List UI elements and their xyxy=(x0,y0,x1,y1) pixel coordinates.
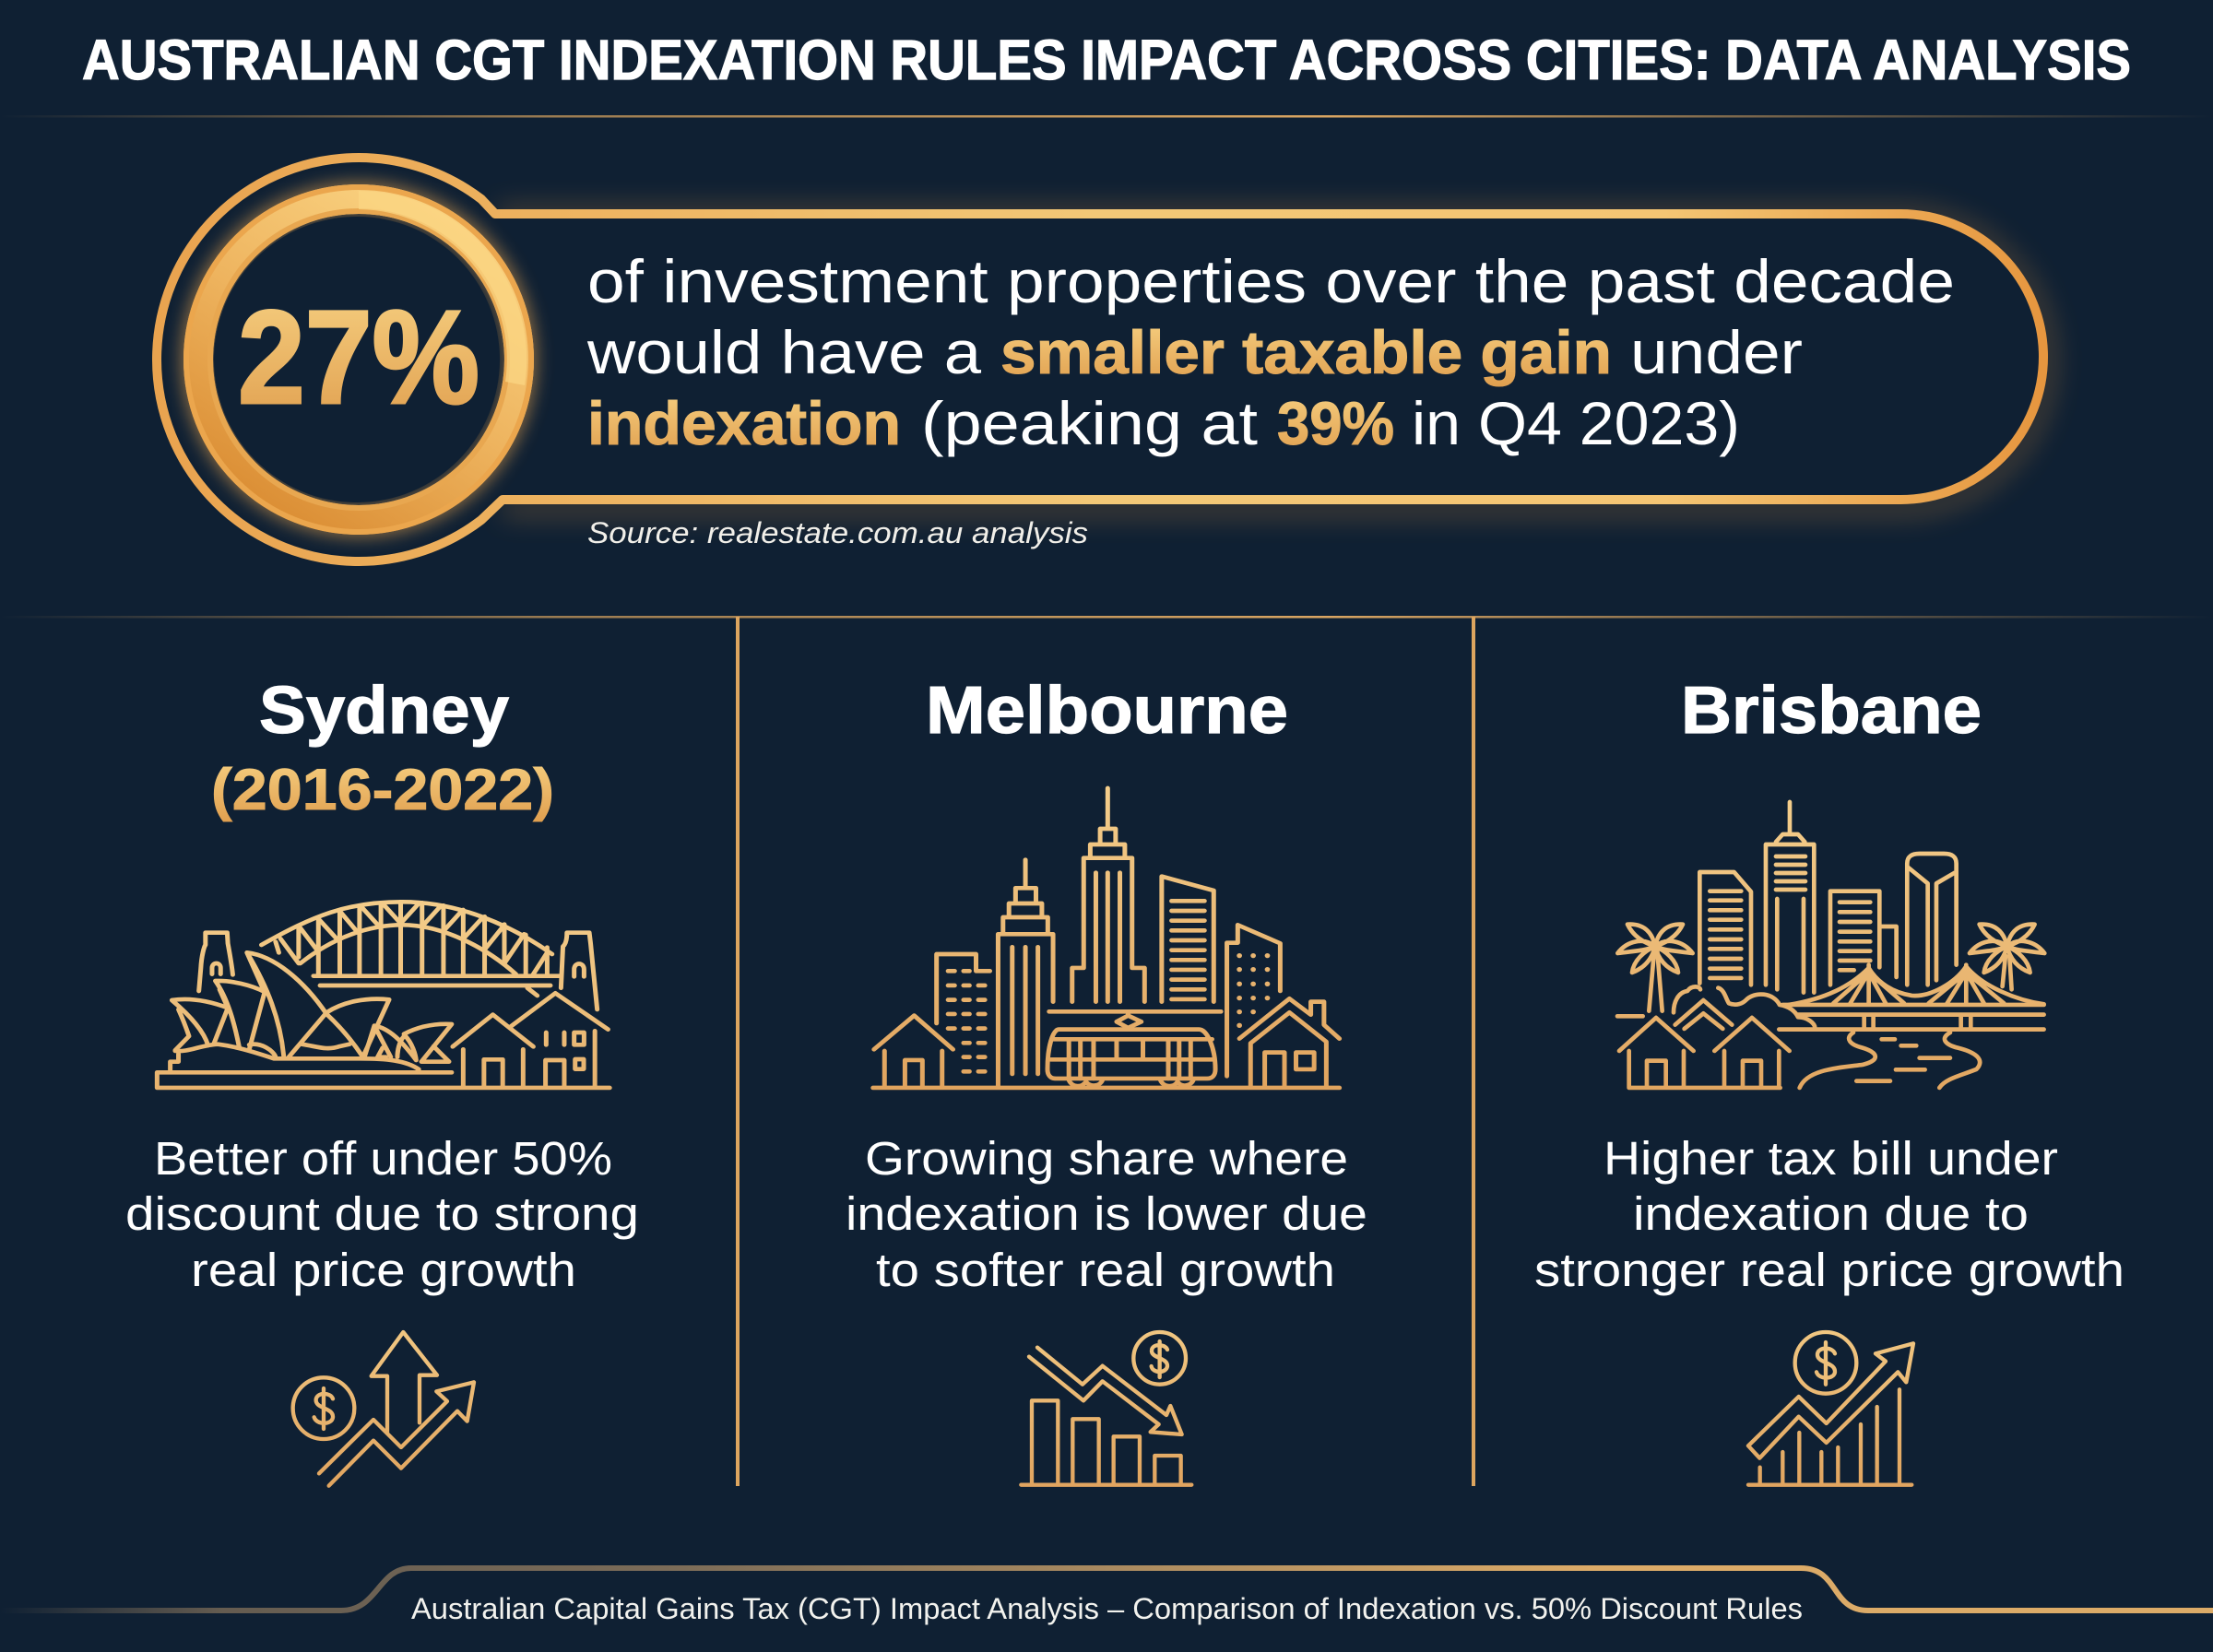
description: Brisbane: Higher tax bill under xyxy=(1604,1132,2058,1185)
icon: rising price chart xyxy=(1748,1332,1913,1485)
statement text: in Q4 2023) xyxy=(1412,389,1740,457)
panel: Brisbane xyxy=(1534,674,2124,1485)
description: Sydney: Better off under 50% xyxy=(154,1132,612,1185)
progress ring xyxy=(186,187,531,532)
pill glow xyxy=(498,214,2048,509)
heading: Sydney: Sydney xyxy=(259,674,509,748)
statement text: (peaking at xyxy=(921,389,1258,457)
description: Melbourne: Growing share where xyxy=(865,1132,1348,1185)
statement text: smaller taxable gain xyxy=(1000,318,1612,386)
description: Brisbane xyxy=(1534,1132,2124,1296)
source: Source: realestate.com.au analysis xyxy=(587,516,1088,549)
panel: headline statistic xyxy=(157,158,2048,561)
icon: falling price chart xyxy=(1021,1332,1191,1485)
icon: Sydney skyline xyxy=(157,902,609,1088)
period: (2016-2022) xyxy=(211,758,554,822)
description: Melbourne: to softer real growth xyxy=(876,1244,1335,1296)
description: Sydney: real price growth xyxy=(191,1244,576,1296)
pill and outer ring outline xyxy=(157,158,2043,561)
description: Melbourne: indexation is lower due xyxy=(846,1187,1367,1240)
description: Sydney xyxy=(125,1132,639,1296)
description: Brisbane: indexation due to xyxy=(1633,1187,2029,1240)
description: Sydney: discount due to strong xyxy=(125,1187,639,1240)
big number: 27% xyxy=(238,283,479,431)
statement text: would have a xyxy=(586,318,981,386)
statement text: under xyxy=(1630,318,1803,386)
icon: Melbourne skyline xyxy=(873,788,1340,1088)
panel: Melbourne xyxy=(846,674,1367,1485)
panel: Sydney xyxy=(125,674,639,1486)
icon: Brisbane skyline xyxy=(1617,802,2044,1088)
ring glow xyxy=(196,197,521,522)
statement text xyxy=(586,247,1955,457)
icon: price up arrows xyxy=(293,1332,474,1486)
description: Melbourne xyxy=(846,1132,1367,1296)
heading: Brisbane: Brisbane xyxy=(1681,674,1982,748)
statement text: of investment properties over the past decade xyxy=(587,247,1955,315)
statement text: indexation xyxy=(587,389,901,457)
heading: Melbourne: Melbourne xyxy=(926,674,1288,748)
description: Brisbane: stronger real price growth xyxy=(1534,1244,2124,1296)
statement text: 39% xyxy=(1277,389,1394,457)
footer rule xyxy=(0,1568,2213,1611)
footer text: Australian Capital Gains Tax (CGT) Impact Analysis – Comparison of Indexation vs. 50% Discount Rules xyxy=(411,1592,1803,1625)
